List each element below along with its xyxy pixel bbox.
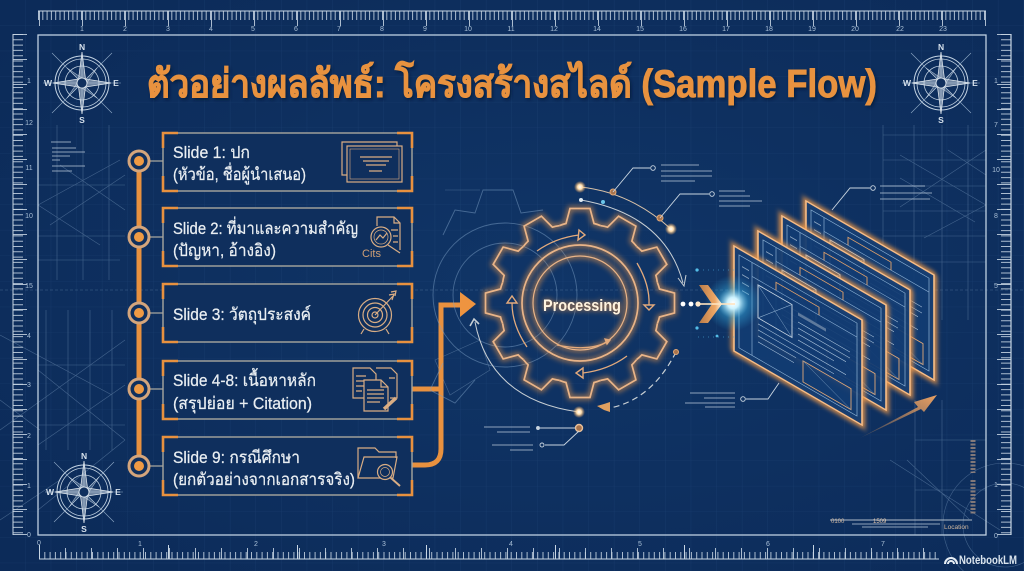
bottom ruler: 1 bbox=[138, 541, 142, 548]
icon: cited document bbox=[362, 217, 400, 260]
arc markers bbox=[573, 181, 678, 432]
panel: slide 3: Slide 3: วัตถุประสงค์ bbox=[173, 305, 311, 325]
top ruler: 20 bbox=[851, 26, 859, 33]
top ruler: 17 bbox=[722, 26, 730, 33]
panel: slide 1: Slide 1: ปก bbox=[173, 143, 250, 162]
compass: top right bbox=[902, 42, 980, 125]
panel: slide 2 bbox=[163, 208, 412, 266]
connector arrowhead bbox=[460, 292, 476, 317]
panel: slide 9: (ยกตัวอย่างจากเอกสารจริง) bbox=[173, 470, 355, 489]
icon: slide stack bbox=[342, 142, 402, 182]
right ruler: 1 bbox=[994, 482, 998, 489]
callout tiny captions bbox=[484, 165, 932, 450]
construction lines bbox=[0, 125, 1024, 571]
top ruler: 12 bbox=[550, 26, 558, 33]
top ruler: 5 bbox=[251, 26, 255, 33]
panel: slide 2: Slide 2: ที่มาและความสำคัญ bbox=[173, 216, 358, 238]
outer arc arrows bbox=[470, 187, 686, 412]
icon: target bbox=[358, 291, 396, 334]
title block: bottom right: Location bbox=[944, 524, 969, 531]
top ruler: 11 bbox=[507, 26, 515, 33]
processing label: Processing bbox=[543, 296, 621, 315]
top ruler: 14 bbox=[593, 26, 601, 33]
bottom ruler: 4 bbox=[509, 541, 513, 548]
bottom ruler bbox=[37, 540, 939, 559]
left ruler: 11 bbox=[25, 165, 33, 172]
panel: slide 1 bbox=[163, 133, 412, 191]
top ruler: 23 bbox=[939, 26, 947, 33]
top ruler: 8 bbox=[380, 26, 384, 33]
left ruler: 2 bbox=[27, 433, 31, 440]
bottom ruler: 3 bbox=[382, 541, 386, 548]
panel: slide 9 bbox=[163, 437, 412, 495]
left ruler: 1 bbox=[27, 483, 31, 490]
top ruler: 3 bbox=[166, 26, 170, 33]
right ruler: 5 bbox=[994, 283, 998, 290]
top ruler: 19 bbox=[808, 26, 816, 33]
title block: bottom right: 1509 bbox=[873, 519, 887, 525]
bottom ruler: 6 bbox=[766, 541, 770, 548]
title block: bottom right: 0100 bbox=[831, 519, 845, 525]
left ruler: 12 bbox=[25, 120, 33, 127]
left ruler: 1 bbox=[27, 78, 31, 85]
title: ตัวอย่างผลลัพธ์: โครงสร้างสไลด์ (Sample Flow) bbox=[147, 61, 877, 106]
top ruler: 6 bbox=[294, 26, 298, 33]
left ruler: 3 bbox=[27, 382, 31, 389]
compass: top left bbox=[43, 42, 121, 125]
top ruler: 7 bbox=[337, 26, 341, 33]
right ruler: 7 bbox=[994, 122, 998, 129]
top ruler: 9 bbox=[423, 26, 427, 33]
panel: slide 4-8: (สรุปย่อย + Citation) bbox=[173, 394, 312, 414]
gear inner rotation arrows bbox=[507, 230, 654, 378]
vertical timeline bbox=[129, 151, 163, 476]
top ruler: 2 bbox=[123, 26, 127, 33]
right ruler: 10 bbox=[992, 167, 1000, 174]
top ruler: 22 bbox=[896, 26, 904, 33]
panel: slide 2: (ปัญหา, อ้างอิง) bbox=[173, 241, 276, 260]
stack direction arrow bbox=[860, 395, 937, 438]
panel: slide 4-8 bbox=[163, 361, 412, 419]
title: ตัวอย่างผลลัพธ์: โครงสร้างสไลด์ (Sample Flow) bbox=[148, 63, 878, 108]
right ruler: 8 bbox=[994, 213, 998, 220]
connector arrow to processing bbox=[412, 305, 462, 465]
panel: slide 1: (หัวข้อ, ชื่อผู้นำเสนอ) bbox=[173, 162, 306, 185]
bottom ruler: 0 bbox=[37, 540, 41, 547]
output arrow with light flare bbox=[681, 268, 761, 337]
title block: bottom right bbox=[830, 440, 973, 531]
faint background gear bbox=[430, 190, 577, 403]
top ruler: 10 bbox=[464, 26, 472, 33]
tiny notes: left margin bbox=[51, 142, 85, 171]
right ruler: 0 bbox=[994, 533, 998, 540]
top ruler bbox=[38, 11, 986, 33]
icon: documents with link bbox=[353, 368, 397, 411]
bottom ruler: 2 bbox=[254, 541, 258, 548]
compass: bottom left bbox=[45, 451, 123, 534]
left ruler bbox=[13, 34, 33, 539]
left ruler: 10 bbox=[25, 213, 33, 220]
panel: slide 3 bbox=[163, 284, 412, 342]
left ruler: 15 bbox=[25, 283, 33, 290]
top ruler: 1 bbox=[80, 26, 84, 33]
panel: slide 4-8: Slide 4-8: เนื้อหาหลัก bbox=[173, 368, 316, 390]
icon: cited document: Cits bbox=[362, 248, 381, 260]
top ruler: 18 bbox=[765, 26, 773, 33]
processing label: Processing bbox=[543, 296, 621, 315]
top ruler: 4 bbox=[209, 26, 213, 33]
bottom ruler: 7 bbox=[881, 541, 885, 548]
gear: processing bbox=[486, 208, 674, 398]
left ruler: 0 bbox=[27, 532, 31, 539]
top ruler: 16 bbox=[679, 26, 687, 33]
icon: folder with magnifier bbox=[358, 448, 400, 486]
stacked slide pages bbox=[734, 201, 934, 425]
panel: slide 9: Slide 9: กรณีศึกษา bbox=[173, 448, 300, 467]
left ruler: 4 bbox=[27, 333, 31, 340]
right ruler: 1 bbox=[994, 78, 998, 85]
right ruler bbox=[992, 34, 1011, 540]
callout lines bbox=[536, 166, 875, 447]
top ruler: 15 bbox=[636, 26, 644, 33]
bottom ruler: 5 bbox=[638, 541, 642, 548]
